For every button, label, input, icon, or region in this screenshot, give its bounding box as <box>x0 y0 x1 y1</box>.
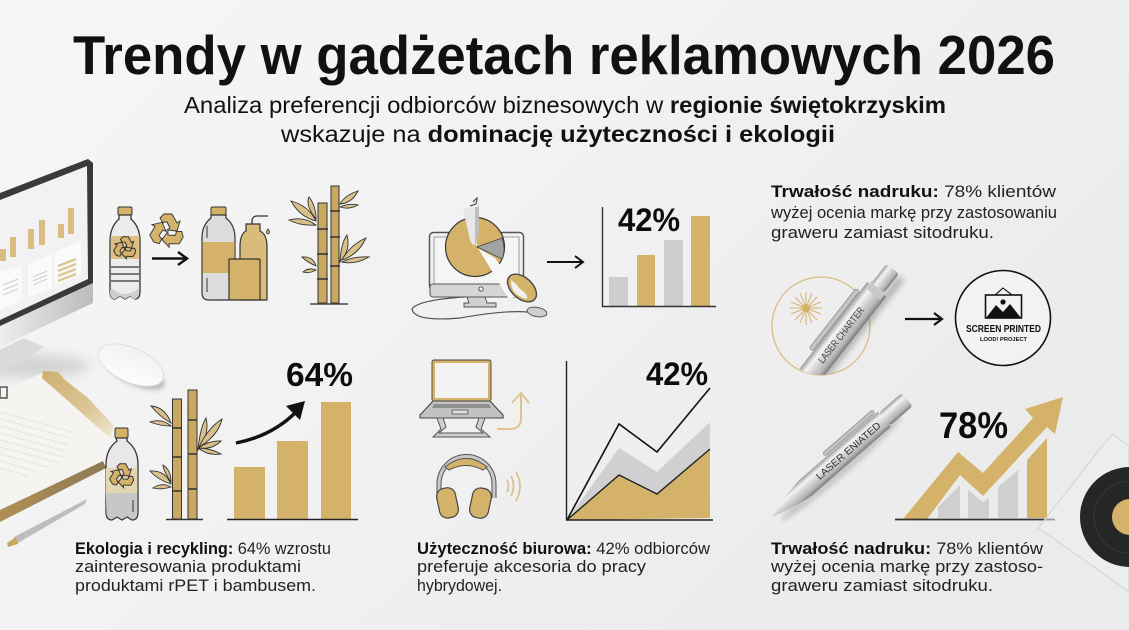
sun burst <box>790 292 822 325</box>
pump bottle <box>240 216 270 300</box>
desk mouse <box>92 335 170 397</box>
arrow: pen to logo <box>905 313 942 325</box>
icon: computer with pie chart and mouse <box>412 198 548 319</box>
text: trwałość nadruku top <box>770 182 1057 242</box>
gold bar <box>1027 438 1047 518</box>
desk pen <box>7 499 87 547</box>
stamp text: SCREEN PRINTED <box>966 324 1041 335</box>
large bottle <box>202 207 235 300</box>
icon: recycled products <box>202 207 270 300</box>
label 64%: 64% <box>286 356 353 393</box>
text: trwałość nadruku bottom: Trwałość nadruku: 78% klientów <box>771 539 1044 558</box>
icon: screen printed stamp: LOOD! PROJECT <box>980 337 1028 343</box>
monitor stand <box>0 338 90 378</box>
icon: silver pen lower: LASER ENIATED <box>814 420 883 483</box>
icon: bamboo top <box>289 186 369 304</box>
icon: laser engraving circle <box>772 277 870 375</box>
label 42%: 42% <box>618 202 680 238</box>
chart: 64% growth bars <box>227 356 358 520</box>
vinyl record on acrylic <box>1038 434 1129 592</box>
title: Trendy w gadżetach reklamowych 2026 <box>73 24 1055 86</box>
text: trwałość nadruku top: wyżej ocenia markę przy zastosowaniu <box>770 203 1057 222</box>
icon: recycled bottle with label <box>110 207 140 299</box>
icon: screen printed stamp <box>956 270 1050 366</box>
icon: headphones <box>435 456 520 520</box>
icon: silver pen with laser engraving: LASER CHARTER <box>817 305 867 366</box>
picture icon <box>986 288 1022 318</box>
chart: 42% bars <box>602 202 716 306</box>
chart: 42% area chart <box>566 356 713 520</box>
text: użyteczność biurowa: preferuje akcesoria do pracy <box>417 557 647 576</box>
text: ekologia i recykling: produktami rPET i bambusem. <box>75 576 316 595</box>
text: trwałość nadruku bottom <box>770 539 1044 595</box>
gold trend arrow <box>903 397 1063 519</box>
chart: 78% arrow <box>895 397 1063 520</box>
icon: silver pen with laser engraving <box>800 265 906 375</box>
arrow: laptop raise <box>497 393 529 429</box>
folder with document <box>0 371 114 522</box>
text: trwałość nadruku top: graweru zamiast sitodruku. <box>771 223 994 242</box>
subtitle <box>184 92 946 147</box>
icon: silver pen lower <box>762 388 914 526</box>
text: ekologia i recykling <box>75 539 331 595</box>
subtitle line 2: wskazuje na dominację użyteczności i ekologii <box>280 121 835 147</box>
icon: recycle symbol <box>146 214 185 251</box>
sound waves <box>507 472 520 501</box>
text: użyteczność biurowa: Użyteczność biurowa: 42% odbiorców <box>417 539 711 558</box>
grey bars <box>938 485 960 518</box>
cable <box>412 297 528 319</box>
box <box>229 259 260 300</box>
text: trwałość nadruku bottom: graweru zamiast sitodruku. <box>771 576 993 595</box>
computer monitor <box>430 232 524 307</box>
monitor screen chart <box>0 208 74 261</box>
arrow: growth <box>236 401 305 443</box>
text: trwałość nadruku bottom: wyżej ocenia markę przy zastoso- <box>770 557 1043 576</box>
monitor screen cards <box>0 241 81 310</box>
arrow: computer to chart <box>547 256 583 268</box>
text: trwałość nadruku top: Trwałość nadruku: 78% klientów <box>771 182 1057 201</box>
big mouse <box>502 269 542 307</box>
text: ekologia i recykling: Ekologia i recykling: 64% wzrostu <box>75 539 331 558</box>
monitor <box>0 159 93 347</box>
icon: laptop on stand <box>420 360 503 437</box>
subtitle line 1: Analiza preferencji odbiorców biznesowych w regionie świętokrzyskim <box>184 92 946 118</box>
text: użyteczność biurowa <box>417 539 711 595</box>
small mouse <box>526 306 548 318</box>
icon: bamboo lower <box>150 390 222 520</box>
pie chart <box>446 198 522 298</box>
icon: bottle lower <box>106 428 138 520</box>
label 78%: 78% <box>939 405 1008 446</box>
text: użyteczność biurowa: hybrydowej. <box>417 576 502 595</box>
desk scene: monitor, mouse, folder, pen <box>0 159 170 547</box>
text: ekologia i recykling: zainteresowania produktami <box>75 557 301 576</box>
arrow: bottle to products <box>152 252 187 265</box>
label 42%: 42% <box>646 356 708 392</box>
